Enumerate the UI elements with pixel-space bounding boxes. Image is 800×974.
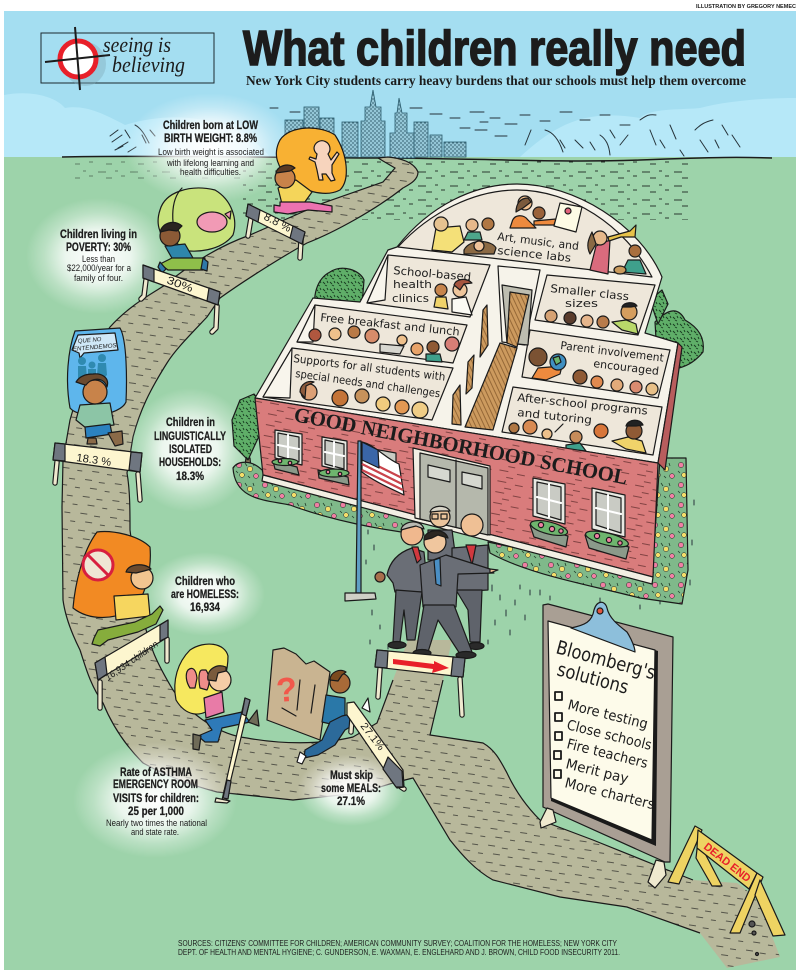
- clip: [571, 602, 635, 652]
- green backpack with pig: [158, 188, 235, 251]
- official with glasses: [428, 506, 456, 560]
- label: poverty: Less than: [82, 254, 115, 264]
- subheading: New York City students carry heavy burdens that our schools must help them overcome: [246, 73, 746, 88]
- family silhouettes: [78, 354, 107, 380]
- child 5: asthma: [175, 644, 259, 750]
- hurdle 8.8%: [246, 204, 305, 258]
- label: linguistically isolated: ISOLATED: [169, 442, 212, 456]
- bush behind school: [315, 268, 364, 330]
- label: linguistically isolated: Children in: [166, 415, 215, 429]
- room label: [497, 230, 580, 265]
- label: homeless: are HOMELESS:: [171, 587, 239, 601]
- health clinic room: [367, 255, 490, 317]
- lawn ticks around officials: [280, 490, 694, 649]
- label: homeless: [171, 574, 239, 614]
- blue backpack: [68, 328, 126, 415]
- child 6: skipping meals: [267, 648, 370, 764]
- sky: [4, 11, 796, 161]
- sources: [178, 939, 620, 957]
- bush right of school lower: [650, 290, 668, 324]
- road edge lines: [62, 157, 700, 933]
- checklist items: [563, 697, 656, 813]
- hurdle asthma: [215, 698, 250, 803]
- label: skipped meals: [321, 768, 381, 808]
- child 1: low birth weight: [274, 128, 346, 214]
- parent involvement room: encouraged: [593, 357, 660, 378]
- yellow backpack with lungs: [175, 644, 228, 714]
- horizon line: [62, 156, 772, 161]
- hurdle 16,934: 16,934 children: [103, 639, 161, 683]
- road dashes: [62, 157, 780, 968]
- hurdle 16,934: [95, 620, 168, 708]
- child 3: linguistic isolation: [68, 328, 126, 446]
- teacher at easel: [510, 196, 582, 232]
- hurdle 30%: 30%: [165, 275, 195, 295]
- roofless white walls: [255, 184, 678, 463]
- front doors: [413, 448, 490, 535]
- header logo: seeing is believing: [41, 27, 214, 90]
- label: asthma: 25 per 1,000: [128, 804, 184, 818]
- flower bed right: [488, 458, 688, 604]
- orange backpack with baby: [276, 128, 346, 193]
- label: homeless: 16,934: [190, 600, 220, 614]
- label: linguistically isolated: HOUSEHOLDS:: [159, 455, 221, 469]
- blue backpack: QUE NO: [78, 337, 102, 345]
- label: poverty: [60, 227, 137, 283]
- official right: [452, 514, 488, 650]
- school building: [255, 184, 682, 584]
- corridor: [452, 266, 540, 430]
- officials: [375, 506, 498, 658]
- hurdle 27.1%: 27.1%: [358, 720, 387, 753]
- checklist items: Fire teachers: [565, 736, 649, 772]
- label: poverty: Children living in: [60, 227, 137, 241]
- label: low birth weight: with lifelong learning and: [166, 158, 254, 168]
- label glow: low birth weight: [125, 93, 295, 203]
- label: asthma: [106, 765, 207, 837]
- after-school room: and tutoring: [517, 406, 593, 427]
- clipboard feet: [540, 808, 666, 888]
- road stub to officials: [393, 640, 452, 680]
- illustration credit: ILLUSTRATION BY GREGORY NEMEC: [696, 4, 796, 10]
- road surface: [62, 157, 780, 968]
- checklist heading: Bloomberg's: [554, 637, 658, 684]
- label: low birth weight: [158, 118, 264, 177]
- health clinic room: health: [393, 278, 432, 291]
- window 2: [318, 437, 349, 485]
- label: linguistically isolated: 18.3%: [176, 469, 204, 483]
- light clouds: [4, 93, 796, 157]
- hurdle 18.3%: [53, 443, 142, 500]
- label glow: linguistic: [128, 388, 252, 512]
- smaller class room: [535, 275, 655, 335]
- supports room: Supports for all students with: [293, 352, 446, 384]
- window 3: [368, 448, 396, 478]
- dead end barrier: [668, 826, 785, 936]
- label: low birth weight: BIRTH WEIGHT: 8.8%: [164, 131, 257, 145]
- school name: GOOD NEIGHBORHOOD SCHOOL: [292, 402, 630, 489]
- parent involvement room: Parent involvement: [560, 339, 665, 365]
- checklist items: Close schools: [565, 717, 653, 754]
- label: skipped meals: some MEALS:: [321, 781, 381, 795]
- child 4: homeless: [73, 532, 163, 646]
- dome room: [398, 190, 652, 277]
- label: homeless: Children who: [175, 574, 235, 588]
- dead end rocks: [749, 921, 758, 956]
- label glow: meals: [297, 754, 405, 826]
- checkboxes: [554, 692, 562, 778]
- speech bubble: [72, 333, 118, 358]
- label: skipped meals: Must skip: [330, 768, 373, 782]
- health clinic room: School-based: [393, 264, 472, 284]
- base strip: [262, 475, 653, 584]
- smaller class room: Smaller class: [550, 282, 630, 303]
- flag and pole: [345, 441, 404, 601]
- sources: SOURCES: CITIZENS' COMMITTEE FOR CHILDREN; AMERICAN COMMUNITY SURVEY; COALITION FOR THE HOMELESS; NEW YORK CITY: [178, 939, 618, 948]
- right side wall: [658, 343, 682, 470]
- hurdle 30%: [141, 265, 220, 332]
- label: asthma: Rate of ASTHMA: [120, 765, 192, 779]
- parent involvement room: [522, 330, 670, 398]
- label: asthma: VISITS for children:: [113, 791, 199, 805]
- music students: [588, 225, 646, 274]
- city skyline: [285, 90, 466, 158]
- checklist items: More testing: [566, 697, 649, 733]
- label: low birth weight: Children born at LOW: [163, 118, 259, 132]
- label: poverty: family of four.: [74, 273, 123, 283]
- clipboard: [540, 602, 673, 888]
- label glow: poverty: [26, 198, 170, 314]
- label: asthma: EMERGENCY ROOM: [113, 777, 198, 791]
- horizon grass texture: [75, 161, 245, 181]
- flower bed left: [233, 462, 424, 535]
- label: poverty: POVERTY: 30%: [66, 240, 131, 254]
- label: low birth weight: health difficulties.: [180, 167, 241, 177]
- label: asthma: and state rate.: [131, 827, 179, 837]
- checklist items: Merit pay: [564, 756, 630, 787]
- hurdle 18.3%: 18.3 %: [76, 452, 112, 469]
- supports room: special needs and challenges: [295, 367, 441, 400]
- label glow: asthma: [73, 742, 237, 858]
- window 4: [529, 478, 569, 547]
- supports room: [263, 348, 453, 420]
- brick wall: [255, 398, 658, 577]
- label: skipped meals: 27.1%: [337, 794, 365, 808]
- after-school room: After-school programs: [517, 391, 649, 418]
- health clinic room: clinics: [392, 292, 429, 305]
- label: linguistically isolated: LINGUISTICALLY: [154, 429, 226, 443]
- bush right of school: [655, 311, 703, 368]
- label: poverty: $22,000/year for a: [67, 263, 131, 273]
- official pointing: [413, 531, 498, 658]
- checklist heading: solutions: [555, 659, 631, 699]
- after-school room: [502, 387, 662, 455]
- label glow: homeless: [145, 552, 265, 636]
- orange backpack: [73, 532, 150, 618]
- grass texture: [240, 160, 690, 220]
- window 1: [272, 430, 302, 475]
- road to school: [62, 157, 780, 968]
- hurdle 27.1%: [347, 702, 404, 789]
- sources: DEPT. OF HEALTH AND MENTAL HYGIENE; C. GUNDERSON, E. WAXMAN, E. ENGLEHARD AND J. BROWN, CHILD FOOD INSECURITY 2011.: [178, 948, 620, 957]
- official left: [375, 522, 428, 648]
- paper bag with question mark: ?: [275, 671, 298, 710]
- label: linguistically isolated: [154, 415, 226, 483]
- smaller class room: sizes: [565, 297, 598, 310]
- tree left of school: [232, 394, 262, 488]
- room label: science labs: [497, 244, 572, 265]
- hurdle 8.8%: 8.8 %: [262, 211, 293, 235]
- window 5: [584, 488, 630, 559]
- child 2: poverty: [158, 188, 235, 273]
- room label: Art, music, and: [497, 230, 580, 253]
- hurdle with red arrow: [375, 650, 465, 715]
- free breakfast room: [297, 305, 467, 363]
- header logo: seeing is believing: seeing is: [103, 32, 171, 57]
- label: asthma: Nearly two times the national: [106, 818, 207, 828]
- blue backpack: ENTENDEMOS: [73, 343, 117, 353]
- label: low birth weight: Low birth weight is associated: [158, 147, 264, 157]
- brick texture: [255, 398, 658, 577]
- header logo: seeing is believing: believing: [112, 52, 185, 77]
- science students: [432, 217, 496, 254]
- dead end barrier: DEAD END: [701, 841, 753, 885]
- checklist items: More charters: [563, 775, 656, 813]
- sky hatching: [110, 108, 740, 156]
- free breakfast room: Free breakfast and lunch: [320, 311, 460, 339]
- baby: [309, 141, 339, 181]
